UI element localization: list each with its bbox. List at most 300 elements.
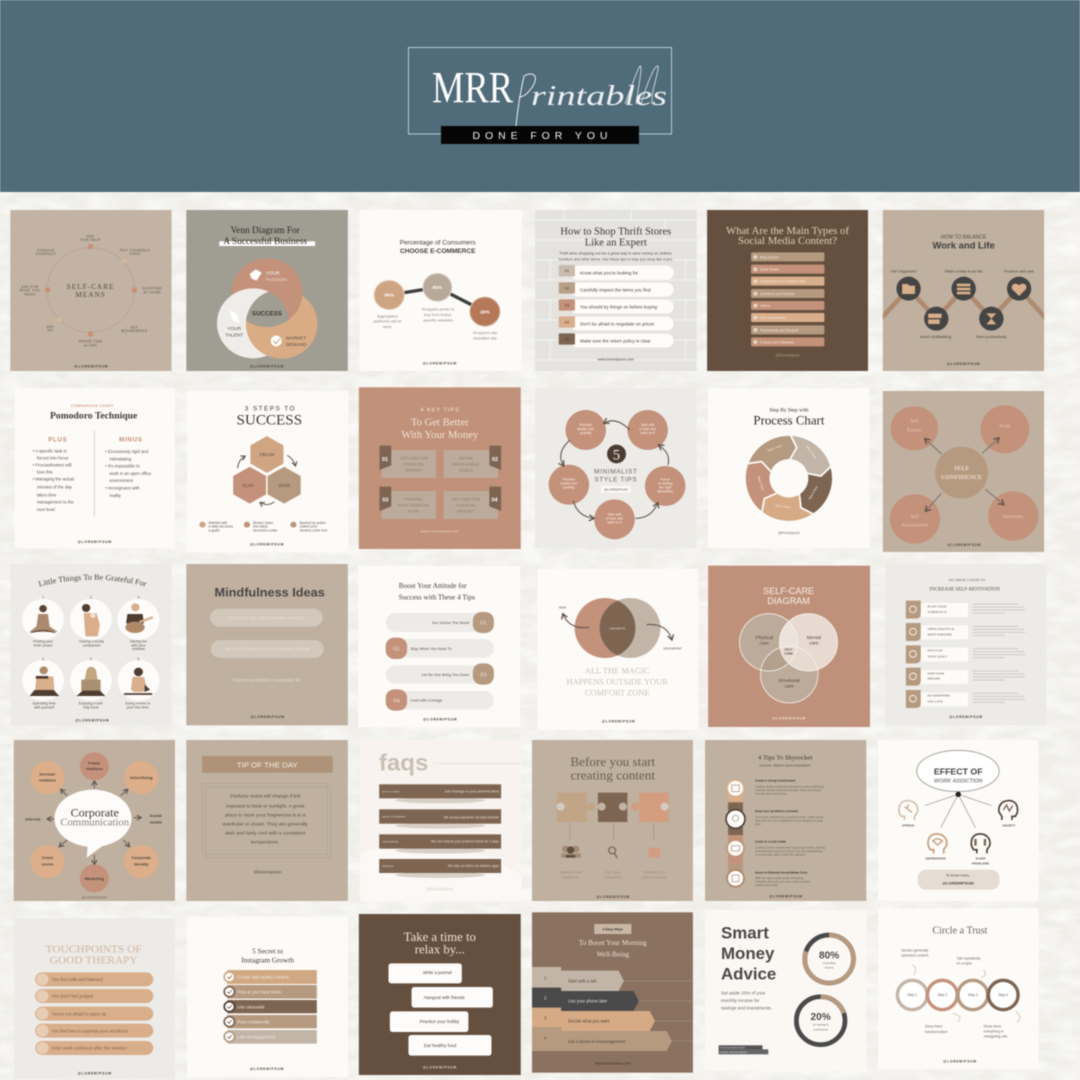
title	[399, 582, 475, 602]
section text: and passing it around it shows you are participating	[755, 849, 823, 853]
legend: becomes a plan	[253, 529, 277, 533]
tip list: Carefully inspect the items you find	[580, 287, 651, 292]
faq text: reservations:	[382, 840, 399, 844]
handle: @LOREMIPSUM	[948, 543, 981, 547]
blob labels: Self	[911, 515, 919, 520]
step rows: DO SOMETHING	[927, 694, 951, 698]
connected bubbles chart: 80%	[433, 285, 443, 291]
tip list: You should try things on before buying	[580, 304, 658, 309]
handle: @loremipsum	[426, 886, 454, 891]
tip boxes: 01	[382, 457, 388, 463]
plus column: takes time	[37, 492, 57, 497]
donut chart 80%: 80%	[819, 950, 839, 961]
step arrows	[532, 967, 672, 1051]
ring chain: Step 1	[907, 993, 917, 997]
tip text: temperature.	[251, 840, 279, 846]
ring labels: YOURSELF	[35, 252, 56, 256]
title	[404, 930, 476, 956]
title bar	[202, 756, 333, 773]
title: INCREASE SELF-MOTIVATION	[929, 587, 1000, 592]
title	[46, 943, 142, 967]
content type list: GIFs and Memes	[760, 316, 786, 320]
number tabs	[386, 612, 494, 711]
plus column: • Managing the actual	[33, 477, 74, 482]
legend: into steps	[253, 525, 268, 529]
blob text: on finding	[658, 482, 673, 486]
circle labels: identity	[134, 861, 149, 866]
blob text: a base and	[606, 516, 623, 520]
donut chart 80%: income	[825, 966, 834, 970]
captions: inner peace	[34, 644, 52, 648]
center badge	[607, 445, 626, 463]
tip boxes	[380, 446, 501, 519]
head icons	[899, 801, 1018, 853]
handle: @LOREMIPSUM	[943, 1060, 977, 1064]
connected bubbles chart: 26%	[480, 310, 491, 316]
title: Venn Diagram For	[231, 225, 300, 235]
title bar: TIP OF THE DAY	[237, 761, 299, 770]
handle: @LOREMIPSUM	[772, 717, 806, 721]
tip boxes: MINDSET	[457, 508, 475, 513]
step rows: FOCUS ON	[927, 649, 943, 653]
section text: Invest in Effective Social Media Tools	[755, 870, 808, 874]
tip boxes: 02	[492, 457, 498, 463]
headline: ALL THE MAGIC	[585, 666, 650, 675]
faq text: Just message us your preferred items	[445, 789, 499, 793]
venn circles	[217, 258, 318, 359]
title: HOW TO BALANCE	[941, 234, 987, 240]
title: Social Media Content?	[738, 235, 837, 247]
blob labels: Inferiority	[1003, 515, 1024, 520]
figure circles	[22, 599, 159, 701]
title: Circle a Trust	[932, 925, 988, 936]
content type list: Videos	[760, 304, 770, 308]
circle labels: care	[760, 640, 769, 645]
headline: HAPPENS OUTSIDE YOUR	[567, 678, 668, 687]
hub dot	[956, 792, 961, 797]
captions: on a topic	[957, 961, 972, 965]
card: main types of social media content	[707, 210, 868, 371]
tip text: Perfume scent will change if left	[230, 794, 301, 800]
handle: @LOREMIPSUM	[82, 896, 108, 900]
bubble text: Corporate	[71, 806, 119, 820]
tip boxes: PREPARE	[404, 496, 423, 501]
call to action pill: To know more,	[946, 873, 970, 877]
title: How to Shop Thrift Stores	[560, 226, 671, 237]
tag: 4 Easy Ways	[603, 927, 623, 931]
title: 3 STEPS TO	[245, 406, 296, 413]
blob text: build on it	[640, 431, 655, 435]
content type list: Infographics and Industry Data	[760, 280, 806, 284]
step text: 1	[544, 975, 547, 980]
step text: Start with a win	[568, 979, 597, 984]
venn icons	[230, 269, 282, 346]
captions: transformation	[925, 1030, 947, 1034]
tip text	[411, 621, 469, 703]
title	[933, 234, 995, 251]
blob text: silhouettes	[657, 490, 674, 494]
placeholder body text lines	[973, 604, 1025, 702]
blob text: build on it	[607, 520, 622, 524]
handle: @LOREMIPSUM	[947, 362, 980, 366]
donut chart 80%	[805, 935, 853, 983]
faq text: mode of payment:	[382, 815, 406, 819]
tip text: You Versus The World	[432, 621, 469, 625]
idea text: Express gratitude in everyday life	[233, 678, 302, 683]
card: 4 tips to skyrocket social media engagement	[705, 740, 866, 901]
faq text: We can reserve your preferred items for 3 days	[431, 840, 499, 844]
handle: @floranipsum	[778, 531, 800, 535]
blob text	[560, 423, 674, 524]
step text	[544, 975, 626, 1044]
title	[241, 948, 294, 964]
section text: post	[755, 822, 761, 826]
content type list: Quick Reads	[760, 268, 779, 272]
section text	[755, 778, 825, 887]
circle labels: Investor	[40, 772, 56, 777]
captions	[901, 949, 1007, 1039]
tip list	[559, 265, 674, 348]
captions: retargeting ads	[984, 1035, 1007, 1039]
plus column: • A specific task is	[33, 448, 67, 453]
bar list: Create high-quality content	[237, 975, 289, 980]
ring labels: FIRST	[130, 252, 141, 256]
donut chart 20%: investments	[813, 1027, 829, 1031]
idea text: Start your day with a positive mindset	[228, 615, 305, 620]
icon labels: SLEEP	[976, 856, 986, 860]
title: SELF-CARE	[763, 586, 814, 596]
circle labels	[755, 635, 821, 688]
circle labels: Corporate	[131, 855, 152, 860]
circle labels: Physical	[755, 635, 773, 640]
title: Percentage of Consumers	[400, 239, 476, 246]
website: www.loremipsum.com	[598, 358, 634, 362]
tip pills	[386, 613, 494, 710]
tip text: wardrobe or closet. They are generally	[223, 821, 308, 827]
handle: @LOREMIPSUM	[423, 1066, 457, 1070]
captions: used.	[383, 324, 392, 329]
ring labels	[20, 234, 162, 347]
headline: COMFORT ZONE	[585, 689, 650, 698]
intro text: furniture and other items. Use these tips to help you shop like a pro.	[559, 257, 673, 261]
blob text: Start with	[641, 423, 655, 427]
captions: Having fun	[130, 640, 147, 644]
title: 4 Tips To Skyrocket	[758, 754, 812, 761]
title: Before you start	[570, 754, 656, 769]
captions: Enjoying a self-	[79, 701, 104, 705]
blob labels: Pride	[1000, 424, 1011, 429]
content type list: E-books and Webinars	[760, 340, 794, 344]
card: little things to be grateful for	[10, 564, 171, 725]
handle: @loremipsum	[254, 870, 282, 875]
tip text: exposed to heat or sunlight. A great	[226, 803, 305, 809]
title: Step By Step with	[769, 408, 809, 414]
handle: @LOREMIPSUM	[250, 364, 284, 368]
blob text: Prioritize	[579, 423, 592, 427]
step rows: DREAMS	[927, 677, 940, 681]
hexagons: DONE	[279, 483, 291, 488]
minus column: MINUS	[119, 437, 143, 444]
title: To Boost Your Morning	[579, 939, 647, 947]
arrow labels: DISCOMFORT	[664, 646, 682, 650]
captions: Section generally	[901, 949, 929, 953]
activity cards	[388, 963, 493, 1056]
legend: Broken down	[253, 521, 273, 525]
footnote tags: Get personalized advice	[720, 1047, 746, 1050]
tip text: Lead with Courage	[411, 699, 442, 703]
title: 5 Secret to	[252, 948, 283, 956]
center badge: 5	[613, 447, 620, 463]
tip boxes: GET A BETTER	[400, 455, 428, 460]
content type list: Testimonials and Reviews	[760, 328, 799, 332]
step rows: YOU LOVE	[927, 699, 943, 703]
tip text	[223, 794, 308, 846]
venn labels: PASSION	[266, 277, 287, 283]
center title	[67, 283, 114, 299]
step labels: Step 3 here	[807, 485, 819, 501]
blob labels	[901, 420, 1024, 529]
puzzle pieces	[557, 793, 669, 822]
handle: @LOREMIPSUM	[250, 1067, 284, 1071]
handle pill	[601, 486, 631, 493]
captions: Aggregation	[377, 313, 398, 318]
captions: hobbies	[132, 647, 145, 651]
donut chart 20%: for savings &	[813, 1023, 829, 1027]
title	[758, 754, 812, 768]
connector arrows	[47, 781, 141, 864]
title: Work and Life	[933, 240, 995, 251]
ring labels: NEED	[25, 292, 36, 296]
oval heading: WORK ADDICTION	[934, 778, 983, 784]
step labels	[756, 443, 819, 509]
card: magic outside comfort zone venn	[537, 569, 698, 730]
idea pills	[210, 609, 324, 658]
captions: Do Your	[606, 870, 621, 875]
venn labels: TALENT	[225, 332, 243, 338]
step rows: MOVE FORWARD	[927, 633, 953, 637]
title: Mindfulness Ideas	[215, 586, 325, 600]
plus column: next level	[37, 507, 55, 512]
hexagons: PLAN	[243, 483, 253, 488]
circle labels: Marketing	[85, 876, 105, 881]
minus column: environment	[110, 478, 134, 483]
blob text: a base and	[639, 427, 656, 431]
number tabs: 03	[480, 671, 487, 678]
handle: @floriandpark	[776, 353, 800, 358]
highlight bar	[219, 241, 315, 246]
legend: a daily becomes	[208, 525, 233, 529]
arrow labels: FEAR	[559, 605, 566, 609]
section text: Looking out for content and upcoming trends, sharing	[755, 846, 825, 850]
card: boost your attitude	[358, 566, 520, 727]
speech bubble	[54, 790, 132, 858]
step labels: Step 1 here	[767, 443, 783, 453]
ring labels: ALONE	[84, 343, 98, 347]
minus column: • It's impossible to	[105, 464, 140, 469]
numbers: 3	[138, 596, 140, 600]
center blob	[935, 447, 988, 499]
title: A Successful Business	[223, 236, 307, 246]
card: smart money advice	[705, 910, 866, 1071]
icon strip	[726, 780, 745, 887]
faq text: how to order:	[382, 789, 400, 793]
call to action pill	[918, 870, 999, 890]
card: self confidence mind map	[883, 391, 1044, 552]
circle labels: Emotional	[779, 678, 800, 683]
title	[570, 754, 656, 783]
title: Process Chart	[753, 413, 825, 427]
center label: CONFIDENCE	[941, 475, 982, 481]
ring labels: SAY	[46, 325, 55, 329]
title: DO THESE 5 STEPS TO	[949, 578, 986, 582]
step text: Get a boost of encouragement	[568, 1039, 626, 1044]
title	[236, 406, 302, 429]
card: percentage of consumers	[360, 210, 522, 371]
title	[721, 924, 776, 983]
title	[763, 586, 814, 606]
frame	[202, 784, 331, 858]
handle: @LOREMIPSUM	[423, 717, 457, 721]
section text: Adding visual content and graphics to any marketing	[755, 785, 824, 789]
venn labels: YOUR	[266, 271, 280, 277]
title	[50, 404, 137, 421]
tip boxes: FINANCIAL	[456, 502, 477, 507]
faq bars	[379, 784, 501, 873]
captions: specific websites	[423, 318, 453, 323]
section text: that look as if you established voice appears in your	[755, 819, 823, 823]
plus column: minutes of the day	[37, 485, 73, 490]
minus column: reality	[110, 493, 122, 498]
step rows: YOUR GOALS	[927, 654, 947, 658]
ring chain	[897, 980, 1018, 1010]
node labels: Practice self-care	[1004, 270, 1034, 274]
ring labels: SET	[130, 325, 138, 329]
numbers	[42, 596, 140, 662]
arched title: Little Things To Be Grateful For	[38, 574, 147, 587]
numbers: 6	[138, 658, 140, 662]
title: creating content	[571, 768, 655, 783]
ring labels: FORGIVE	[37, 248, 55, 252]
node labels	[891, 270, 1034, 339]
blob labels: Esteem	[907, 428, 922, 433]
venn labels: SUCCESS	[252, 311, 282, 318]
circle labels: comm	[41, 861, 54, 866]
zigzag path with nodes	[878, 277, 1049, 331]
minus column: intimidating	[110, 456, 132, 461]
captions: help book	[83, 705, 99, 709]
blob labels: Actualization	[901, 524, 929, 529]
captions: Shoppers use	[473, 330, 497, 335]
circle labels: relations	[86, 766, 104, 771]
card: 4 key tips money	[359, 387, 521, 549]
minus column: • Incongruent with	[105, 486, 140, 491]
step rows	[906, 601, 968, 708]
tip boxes: GET A BETTER	[452, 496, 480, 501]
body text: monthly income for	[721, 998, 760, 1003]
venn labels: MARKET	[286, 336, 306, 342]
connected bubbles chart: 96%	[384, 293, 395, 299]
tip text: Stop When You Have To	[411, 647, 451, 651]
donut chart 20%	[796, 997, 845, 1045]
title: faqs	[379, 751, 428, 777]
faq text: We accept payments via bank transfer	[444, 815, 500, 819]
blob text: Focus	[661, 478, 670, 482]
tip text: dark and fairly cool with a consistent	[225, 831, 306, 837]
tip boxes: MINDSET	[405, 468, 423, 473]
donut chart 20%: 20%	[811, 1012, 831, 1023]
tip blobs	[549, 410, 685, 539]
title	[401, 408, 479, 441]
title: DIAGRAM	[767, 596, 810, 606]
card: 3 steps to success	[187, 391, 349, 552]
step labels: Step 4 here	[775, 503, 791, 509]
intro text	[559, 252, 673, 261]
ring labels: AT HOME	[143, 291, 161, 295]
tip list: 05	[565, 336, 570, 341]
title: SUCCESS	[236, 413, 302, 429]
captions: with your	[131, 643, 146, 647]
plus column: forced into focus	[37, 455, 68, 460]
ring labels: NO	[47, 329, 53, 333]
handle: @LOREMIPSUM	[423, 362, 457, 366]
section text: strategy always improves blogger views and boost	[755, 788, 821, 792]
circle labels: SELF	[785, 648, 793, 652]
activity labels: Hangout with friends	[424, 995, 465, 1000]
node icons	[902, 284, 1026, 324]
icon labels: ANXIETY	[1002, 824, 1016, 828]
minus column: • Excessively rigid and	[105, 449, 149, 454]
center title: MEANS	[75, 291, 106, 299]
card: tip of the day	[186, 740, 348, 901]
circle labels: Crisis	[42, 855, 54, 860]
icon labels: DEPRESSION	[926, 856, 946, 860]
title: Smart	[721, 924, 769, 943]
tip boxes: MEASURABLE	[453, 461, 480, 466]
step text: 3	[544, 1015, 547, 1020]
tip list: 03	[565, 302, 570, 307]
card: venn diagram for a successful business	[186, 210, 348, 371]
title: relax by...	[415, 943, 465, 956]
center label: SELF	[954, 466, 970, 472]
ring chain: Step 3	[968, 993, 978, 997]
bar list: Lots of engagement	[237, 1034, 276, 1039]
title: Advice	[721, 964, 776, 983]
ring labels: ASK	[87, 234, 95, 238]
step text: Decide what you want	[568, 1019, 610, 1024]
section text: security and community	[755, 792, 787, 796]
circle labels: Mental	[807, 635, 821, 640]
captions: platforms will be	[373, 319, 402, 324]
tip boxes: DEFINE	[459, 455, 474, 460]
title	[579, 939, 647, 959]
card: circle a trust	[878, 908, 1039, 1069]
tip boxes: PLAN	[408, 508, 419, 513]
content type list: Blog content	[760, 255, 779, 259]
handle: @LOREMIPSUM	[769, 895, 803, 899]
legend	[199, 521, 327, 533]
tip list: Make sure the return policy is clear	[580, 338, 651, 343]
captions	[373, 306, 497, 340]
captions: with yourself	[34, 705, 54, 709]
title: What Are the Main Types of	[726, 225, 849, 237]
hexagons	[232, 435, 301, 504]
blob text: quantity	[580, 431, 592, 435]
pill list	[35, 972, 153, 1055]
step labels: Step 5 here	[756, 475, 765, 491]
circle labels: care	[785, 683, 794, 688]
handle: @LOREMIPSUM	[75, 718, 109, 722]
circle labels: Public	[88, 760, 101, 765]
